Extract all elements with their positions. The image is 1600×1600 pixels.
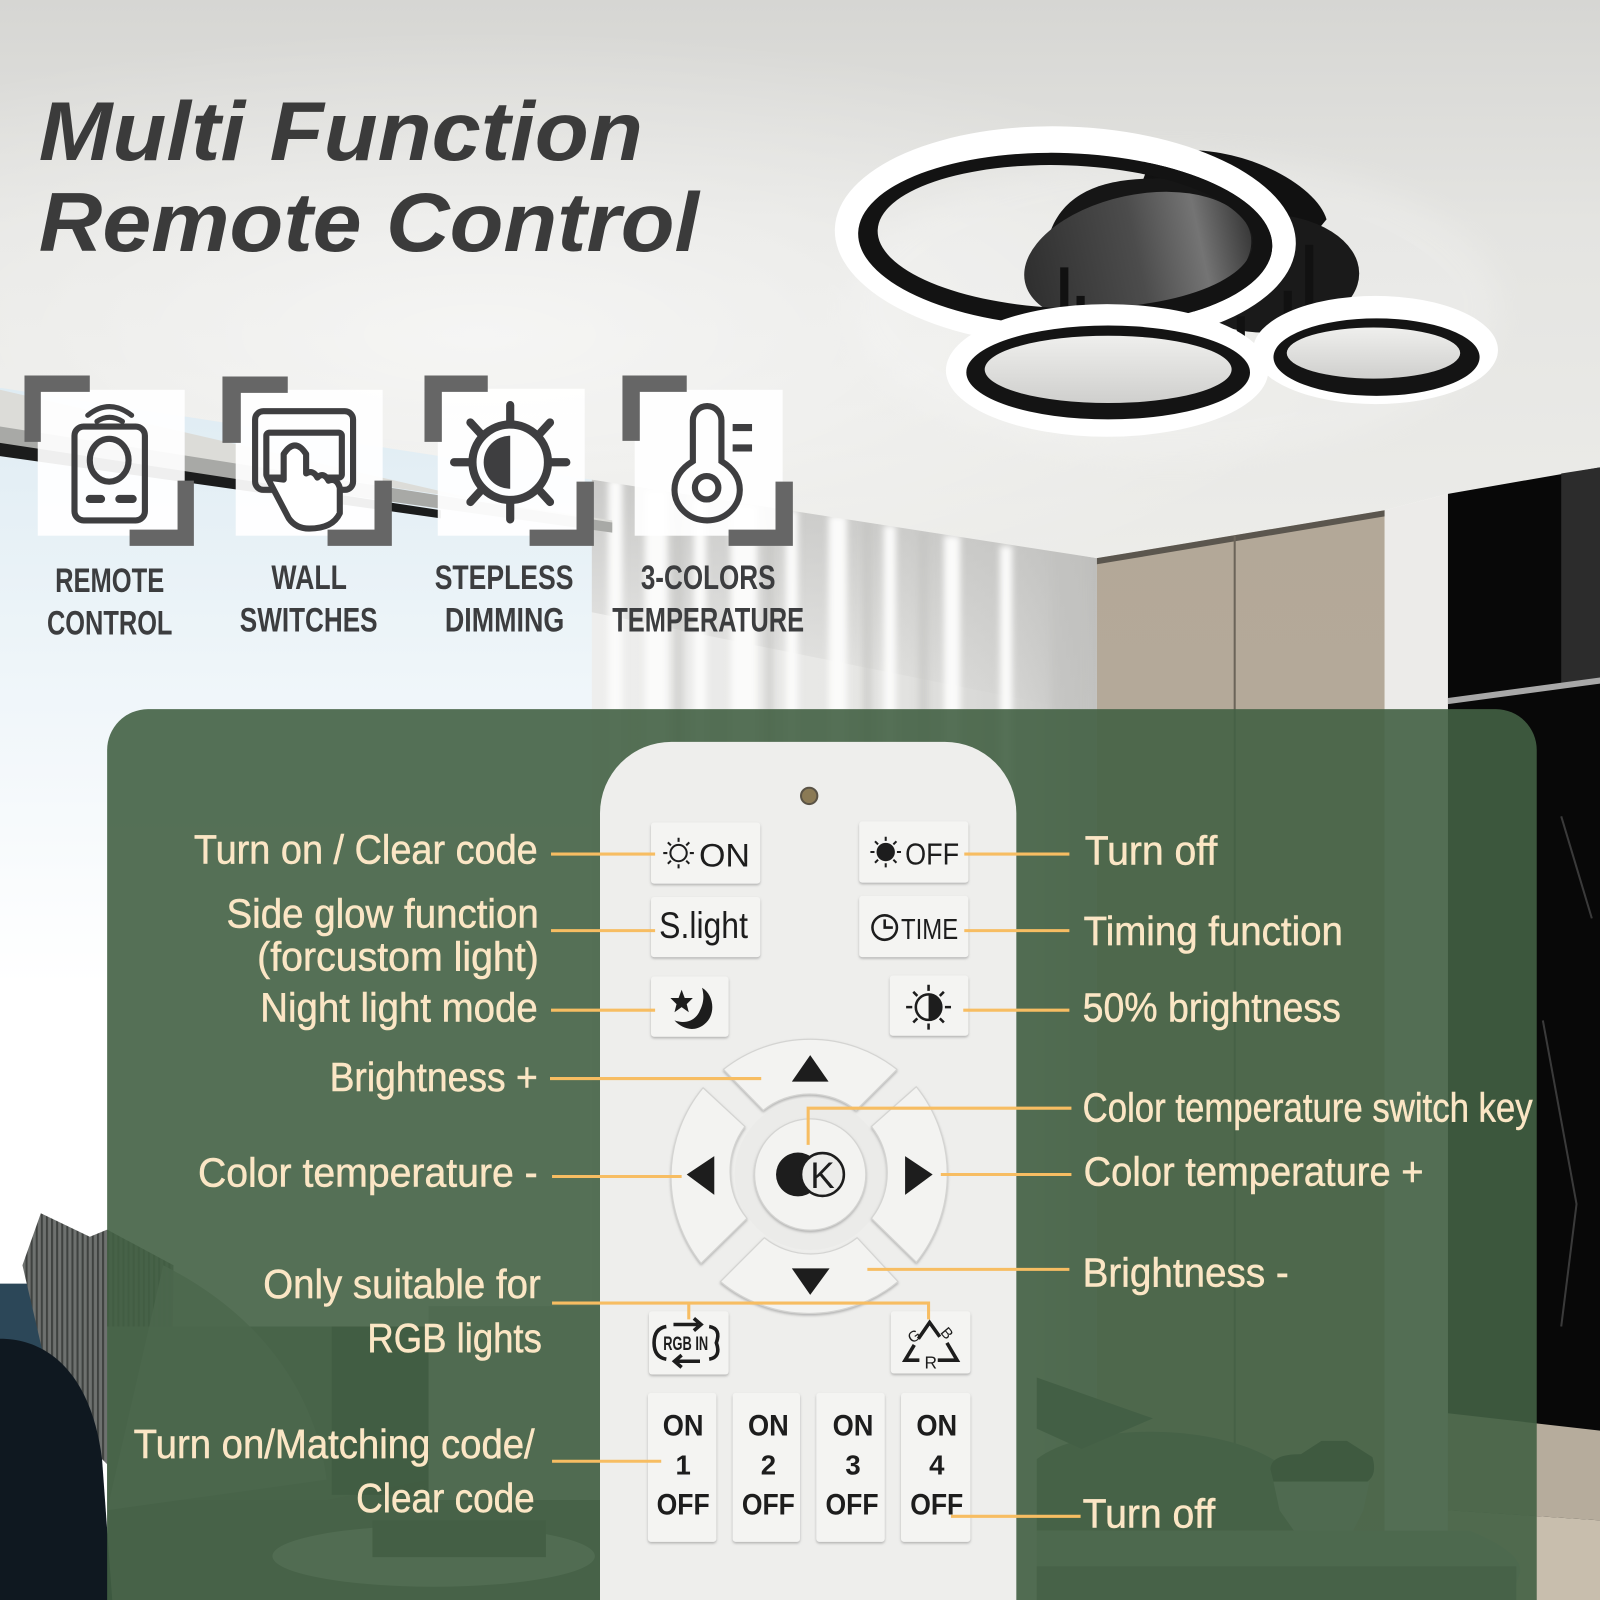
callouts left: Clear code [356,1475,535,1521]
icon: half sun [454,405,566,519]
button: night light [651,977,729,1037]
button: zone 4: ON [916,1410,957,1443]
label: remote control: CONTROL [47,605,172,643]
button: zone 4: 4 [929,1449,945,1480]
label: wall switches: WALL [271,559,347,597]
button: rgb recycle: R [924,1352,937,1372]
feature: stepless dimming [424,376,594,640]
callouts left: Turn on/Matching code/ [134,1421,535,1467]
feature: wall switches [222,377,392,640]
label: stepless dimming: STEPLESS [435,559,573,597]
callouts left: Brightness + [330,1054,538,1100]
callouts right: Timing function [1084,908,1343,954]
feature: remote control [24,376,194,643]
label: remote control: REMOTE [55,562,164,600]
label: stepless dimming [435,559,573,640]
callouts right: Turn off [1083,1491,1216,1537]
button: zone 4: OFF [910,1488,963,1521]
callouts right: 50% brightness [1083,984,1341,1030]
label: 3-colors temperature: 3-COLORS [641,559,776,597]
button: time [859,896,968,957]
button: off: OFF [905,837,959,871]
callouts left: Night light mode [260,984,538,1030]
icon: colour temperature k: K [810,1155,835,1196]
button: rgb in: RGB IN [663,1333,708,1355]
icon: colour temperature k [776,1153,844,1196]
button: rgb in [649,1311,729,1374]
button: zone 1: OFF [657,1488,710,1521]
callouts right: Brightness - [1083,1250,1289,1296]
title: Remote Control [39,175,701,269]
callouts left: Color temperature - [198,1150,538,1196]
title: Multi Function [39,84,643,178]
button: time: TIME [901,914,958,946]
callouts right: Color temperature switch key [1083,1084,1533,1130]
icon: hand on switch [255,411,353,529]
label: 3-colors temperature [612,559,804,640]
button: zone 2 [733,1393,800,1542]
button: 50% brightness [890,976,968,1036]
callouts left: RGB lights [367,1315,542,1361]
button: zone 3: OFF [826,1488,879,1521]
ceiling lamp product [831,119,1500,459]
button: off [859,821,968,883]
button: zone 1 [648,1393,716,1542]
title [39,84,701,269]
button: zone 2: ON [748,1410,789,1443]
remote control body [600,742,1016,1600]
callouts left: Turn on / Clear code [194,826,538,872]
callout leader lines [550,854,1081,1516]
label: stepless dimming: DIMMING [445,602,564,640]
button: rgb recycle [891,1311,970,1373]
button: on [651,822,760,884]
button: s.light [651,897,760,957]
callouts right [1083,827,1533,1537]
button: zone 2: OFF [742,1488,795,1521]
label: wall switches [240,559,378,640]
label: 3-colors temperature: TEMPERATURE [612,602,804,640]
panel: green remote guide [107,709,1537,1600]
button: zone 3: 3 [845,1449,861,1480]
label: remote control [47,562,172,643]
button: on: ON [699,836,750,873]
button: zone 2: 2 [761,1449,776,1480]
button: zone 1: 1 [675,1449,691,1480]
feature: 3-colors temperature [612,376,804,640]
button: zone 3: ON [833,1410,873,1443]
callouts right: Color temperature + [1084,1149,1423,1195]
label: wall switches: SWITCHES [240,602,378,640]
d-pad [671,1039,947,1313]
icon: thermometer [674,406,752,520]
button: zone 4 [901,1393,970,1542]
button: rgb recycle: B [937,1324,956,1343]
button: rgb recycle: G [905,1326,924,1347]
callouts left [134,826,542,1521]
callouts left: Only suitable for [263,1261,541,1307]
callouts right: Turn off [1085,827,1218,873]
callouts left: Side glow function [227,891,539,937]
indicator light [801,788,817,804]
button: zone 3 [816,1393,885,1542]
callouts left: (forcustom light) [257,933,539,979]
icon: remote [74,407,145,520]
button: s.light: S.light [659,905,748,946]
button: zone 1: ON [663,1410,704,1443]
